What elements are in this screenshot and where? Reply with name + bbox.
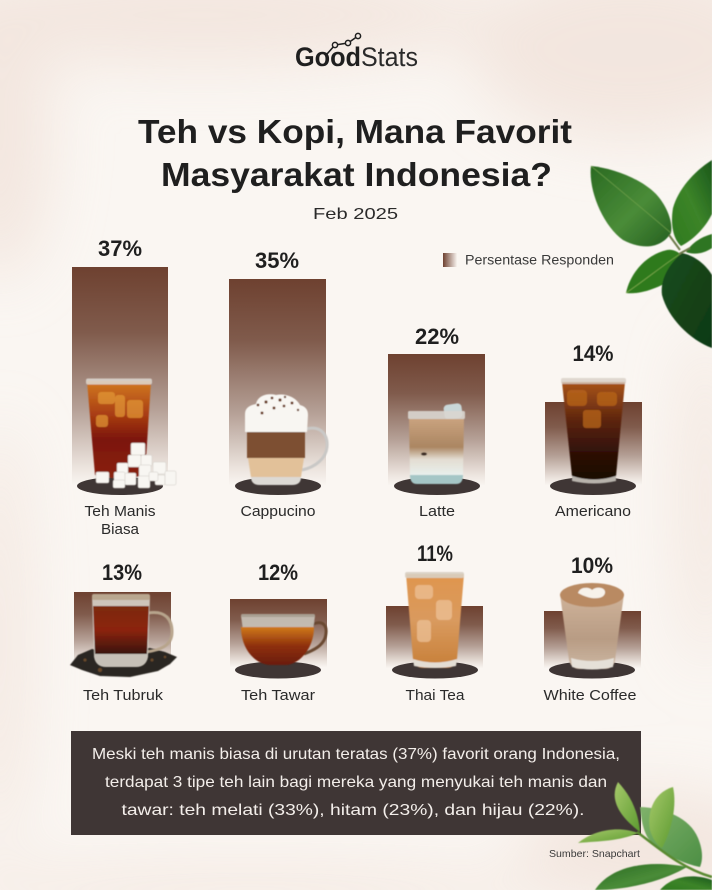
bar: Teh Tawar: 12%	[258, 560, 298, 585]
bar: Teh Manis Biasa: Biasa	[101, 521, 140, 538]
leaves: bottom right	[578, 782, 712, 890]
icon: loose tea leaves	[70, 648, 177, 677]
bar: Cappucino: 35%	[255, 248, 299, 273]
icon: iced latte glass	[408, 403, 465, 484]
bar: Cappucino	[229, 248, 327, 520]
bar: Cappucino: Cappucino	[240, 503, 316, 520]
bar: Teh Tubruk	[70, 560, 177, 704]
icon: cappuccino glass cup	[245, 394, 327, 485]
callout: summary panel	[71, 731, 641, 835]
icon: iced americano glass	[561, 378, 626, 484]
bar: White Coffee	[544, 553, 641, 704]
bar: Teh Tawar: Teh Tawar	[241, 687, 315, 704]
bar: White Coffee: 10%	[571, 553, 613, 578]
bar: Latte	[388, 324, 485, 520]
bar: Thai Tea: 11%	[417, 541, 453, 566]
title: Teh vs Kopi, Mana Favorit	[138, 113, 572, 150]
logo: GoodStats: Stats	[361, 42, 418, 72]
logo: GoodStats	[295, 33, 418, 72]
title	[138, 113, 572, 193]
bar: Teh Tubruk: Teh Tubruk	[83, 687, 164, 704]
callout: summary panel: terdapat 3 tipe teh lain bagi mereka yang menyukai teh manis dan	[105, 774, 607, 791]
bar: Teh Manis Biasa	[72, 236, 176, 538]
bar: Thai Tea: Thai Tea	[406, 687, 465, 704]
bar: Teh Manis Biasa: 37%	[98, 236, 142, 261]
callout: summary panel: tawar: teh melati (33%), hitam (23%), dan hijau (22%).	[122, 802, 584, 819]
bar: Teh Tubruk: 13%	[102, 560, 142, 585]
icon: iced sweet tea with sugar cubes	[86, 378, 176, 488]
bar: Latte: Latte	[419, 503, 455, 520]
source note: Sumber: Snapchart	[549, 848, 640, 860]
logo: GoodStats: Good	[295, 42, 361, 72]
title: Masyarakat Indonesia?	[161, 156, 552, 193]
subtitle: date: Feb 2025	[313, 206, 398, 223]
bar: Americano: 14%	[572, 341, 614, 366]
leaves: top right	[591, 160, 712, 348]
icon: flat white glass	[560, 583, 624, 670]
callout: summary panel: Meski teh manis biasa di urutan teratas (37%) favorit orang Indonesia,	[92, 746, 620, 763]
bar: Latte: 22%	[415, 324, 459, 349]
legend: Persentase Responden	[465, 252, 614, 268]
icon: tea cup	[241, 614, 326, 665]
bar: Teh Manis Biasa: Teh Manis	[84, 503, 156, 520]
icon: glass tea mug	[92, 594, 172, 667]
bar: Teh Tawar	[230, 560, 327, 704]
bar: Americano: Americano	[555, 503, 631, 520]
icon: iced thai tea glass	[405, 572, 464, 668]
bar: White Coffee: White Coffee	[544, 687, 636, 704]
bar: Americano	[545, 341, 642, 520]
bar: Thai Tea	[386, 541, 483, 704]
